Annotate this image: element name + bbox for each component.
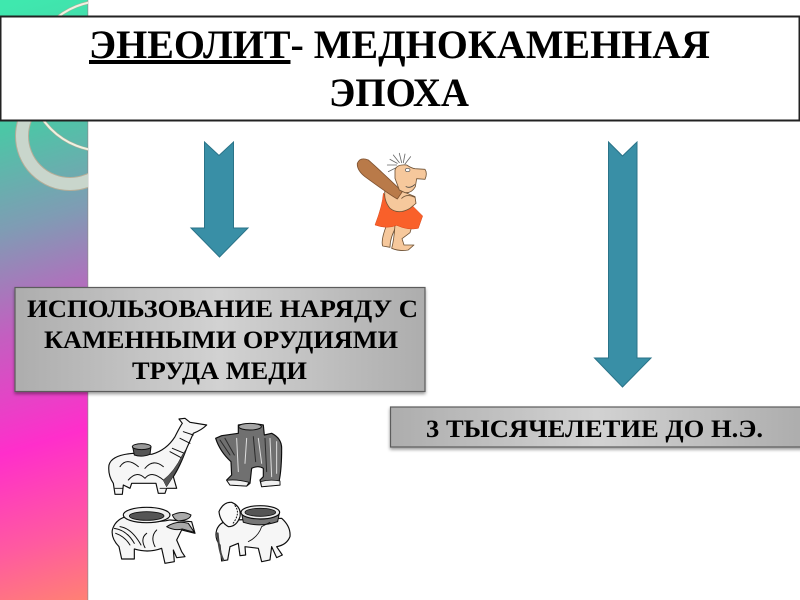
caveman eye and mouth: [405, 168, 410, 172]
vessel: giraffe: [109, 418, 207, 494]
caveman club: [357, 159, 402, 199]
icon: caveman with club: [357, 153, 426, 251]
panel: copper use: [15, 288, 425, 392]
caveman skirt: [375, 193, 423, 229]
arrow: right down arrow: [594, 142, 651, 387]
icon: four animal-shaped copper age vessels: [109, 418, 290, 563]
title box: [0, 16, 800, 120]
copper use text: КАМЕННЫМИ ОРУДИЯМИ: [44, 325, 398, 354]
date text: 3 ТЫСЯЧЕЛЕТИЕ ДО Н.Э.: [426, 414, 763, 443]
copper use text: ТРУДА МЕДИ: [132, 356, 307, 385]
vessel: round pot: [216, 502, 290, 562]
caveman hair: [387, 153, 411, 172]
copper use text: ИСПОЛЬЗОВАНИЕ НАРЯДУ С: [27, 294, 418, 323]
panel: date: [390, 407, 800, 447]
title text: [89, 22, 710, 115]
arrow: left down arrow: [191, 142, 248, 257]
caveman torso: [385, 190, 416, 212]
caveman legs: [382, 225, 397, 247]
title text: ЭПОХА: [329, 70, 469, 115]
vessel: bird bowl: [112, 507, 195, 563]
vessel: bear: [216, 423, 282, 487]
left gradient sidebar: [0, 0, 88, 600]
title text: ЭНЕОЛИТ- МЕДНОКАМЕННАЯ: [89, 22, 710, 67]
caveman head: [395, 165, 426, 193]
copper use text: [27, 294, 418, 385]
